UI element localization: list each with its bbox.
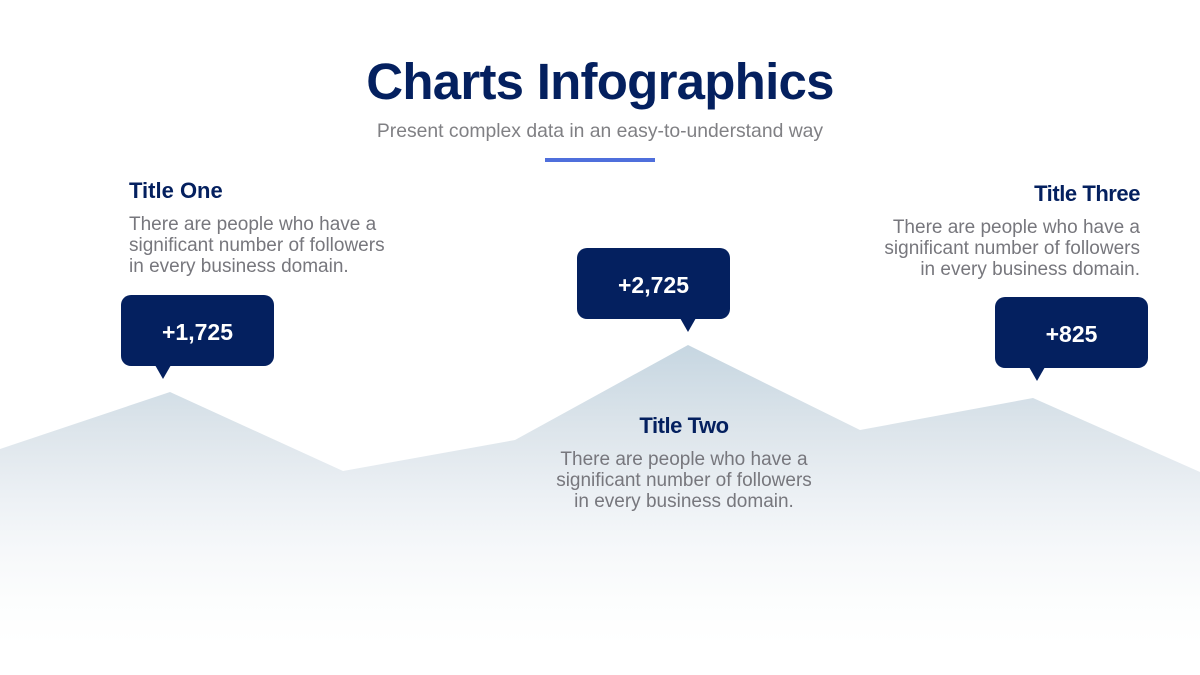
text block: title three bbox=[884, 181, 1140, 280]
text block: title three: Title Three bbox=[1034, 181, 1140, 206]
title underline bbox=[545, 158, 655, 162]
text block: title three: in every business domain. bbox=[920, 259, 1140, 280]
callout: +1,725 bbox=[121, 295, 274, 366]
callout: +2,725: +2,725 bbox=[618, 272, 689, 298]
text block: title three: significant number of followers bbox=[884, 238, 1140, 259]
subtitle: Present complex data in an easy-to-understand way bbox=[377, 120, 823, 142]
text block: title one: Title One bbox=[129, 178, 223, 203]
callout: +1,725: +1,725 bbox=[162, 319, 233, 345]
callout: +825 bbox=[995, 297, 1148, 368]
text block: title one: in every business domain. bbox=[129, 256, 349, 277]
text block: title three: There are people who have a bbox=[893, 217, 1140, 238]
text block: title two: significant number of followers bbox=[556, 470, 812, 491]
text block: title two: Title Two bbox=[639, 413, 729, 438]
callout: +825: +825 bbox=[1046, 321, 1097, 347]
text block: title two: There are people who have a bbox=[560, 449, 808, 470]
text block: title one bbox=[129, 178, 385, 277]
text block: title two: in every business domain. bbox=[574, 491, 794, 512]
text block: title one: significant number of followers bbox=[129, 235, 385, 256]
callout: +2,725 bbox=[577, 248, 730, 319]
title: Charts Infographics bbox=[366, 53, 834, 110]
text block: title two bbox=[556, 413, 812, 512]
text block: title one: There are people who have a bbox=[129, 214, 376, 235]
